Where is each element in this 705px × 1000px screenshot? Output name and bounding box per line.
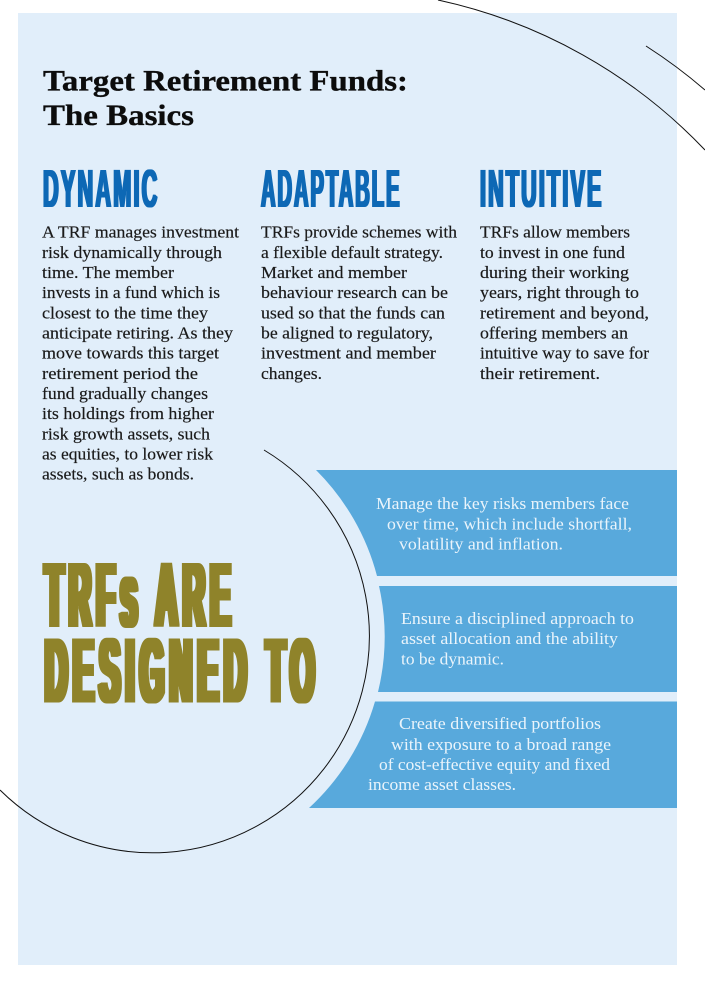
text: dynamic body: risk growth assets, such	[42, 424, 211, 443]
infographic page: TRFs ARE	[45, 546, 236, 646]
text: dynamic body: closest to the time they	[42, 303, 209, 322]
text: dynamic body: assets, such as bonds.	[42, 465, 194, 484]
bar shape 2	[378, 586, 677, 692]
text: intuitive body: during their working	[480, 263, 629, 282]
text: dynamic body: fund gradually changes	[42, 384, 208, 403]
text: adaptable body: TRFs provide schemes with	[261, 223, 458, 242]
text: disciplined approach	[401, 609, 634, 668]
bar shape 1	[316, 470, 677, 576]
text: dynamic body: as equities, to lower risk	[42, 444, 214, 463]
text: disciplined approach: asset allocation and the ability	[401, 629, 619, 648]
text: dynamic body: time. The member	[42, 263, 175, 282]
text: dynamic body: A TRF manages investment	[42, 223, 239, 242]
text: intuitive body	[480, 223, 650, 383]
column: adaptable: ADAPTABLE	[261, 159, 402, 219]
text: adaptable body: behaviour research can be	[261, 283, 448, 302]
text: adaptable body	[261, 223, 458, 383]
panel: disciplined approach	[378, 586, 677, 692]
text: manage risks: over time, which include shortfall,	[387, 514, 632, 534]
text: manage risks: Manage the key risks members face	[376, 494, 629, 513]
decorative arc: top large	[438, 0, 705, 150]
text: diversified portfolios: income asset classes.	[368, 775, 516, 794]
text: manage risks	[376, 494, 632, 554]
text: disciplined approach: Ensure a disciplined approach to	[401, 609, 634, 628]
text: diversified portfolios: of cost-effective equity and fixed	[379, 755, 611, 774]
text: adaptable body: a flexible default strategy.	[261, 243, 443, 262]
bar shape 3	[309, 702, 677, 808]
title: Target Retirement Funds:	[43, 66, 408, 98]
title: The Basics	[43, 100, 194, 132]
text: intuitive body: retirement and beyond,	[480, 303, 649, 322]
text: disciplined approach: to be dynamic.	[401, 650, 504, 668]
text: dynamic body: anticipate retiring. As they	[42, 323, 234, 342]
text: intuitive body: to invest in one fund	[480, 243, 626, 262]
panel: diversified portfolios	[309, 702, 677, 808]
circle outline	[0, 450, 369, 853]
text: intuitive body: years, right through to	[480, 283, 639, 302]
title	[43, 66, 408, 132]
text: intuitive body: offering members an	[480, 323, 628, 342]
text: intuitive body: intuitive way to save for	[480, 344, 650, 363]
text: diversified portfolios	[368, 714, 611, 794]
panel: manage risks	[316, 470, 677, 576]
text: dynamic body	[42, 223, 239, 484]
text: diversified portfolios: with exposure to a broad range	[391, 735, 611, 754]
column: dynamic	[42, 159, 239, 484]
column: dynamic: DYNAMIC	[43, 159, 160, 219]
text: intuitive body: TRFs allow members	[480, 223, 630, 242]
text: dynamic body: invests in a fund which is	[42, 283, 220, 302]
text: intuitive body: their retirement.	[480, 364, 600, 383]
text: adaptable body: investment and member	[261, 344, 437, 363]
column: adaptable	[261, 159, 458, 383]
text: adaptable body: be aligned to regulatory,	[261, 323, 433, 342]
text: dynamic body: its holdings from higher	[42, 404, 215, 423]
text: adaptable body: Market and member	[261, 263, 408, 282]
big heading: TRFs are designed to	[45, 546, 320, 722]
text: dynamic body: move towards this target	[42, 344, 219, 363]
text: adaptable body: used so that the funds can	[261, 303, 445, 322]
column: intuitive	[480, 159, 650, 383]
text: diversified portfolios: Create diversified portfolios	[399, 714, 601, 733]
text: dynamic body: retirement period the	[42, 364, 198, 383]
text: dynamic body: risk dynamically through	[42, 243, 223, 262]
text: manage risks: volatility and inflation.	[399, 534, 563, 554]
decorative arc: top right small	[646, 46, 705, 90]
text: adaptable body: changes.	[261, 364, 322, 383]
